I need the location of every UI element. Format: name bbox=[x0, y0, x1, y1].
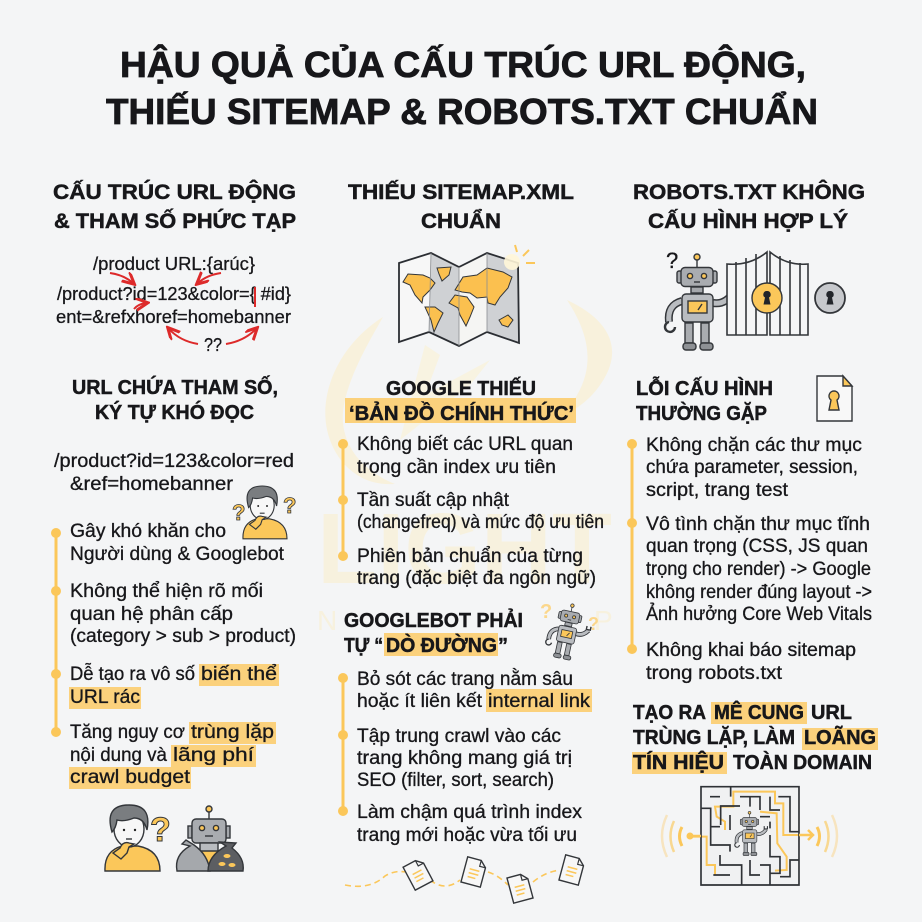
bullet list: trọng cần index ưu tiên bbox=[357, 456, 556, 478]
heading: dynamic URL: CẤU TRÚC URL ĐỘNG bbox=[53, 179, 296, 204]
icon: robot at locked gate bbox=[665, 248, 845, 350]
bullet list: hoặc ít liên kết bbox=[357, 690, 483, 712]
heading: Google lacks official map: GOOGLE THIẾU bbox=[386, 377, 536, 400]
bullet list: (category > sub > product) bbox=[70, 625, 296, 647]
watermark logo: N bbox=[317, 605, 337, 636]
bullet list: trọng cho render) -> Google bbox=[646, 558, 871, 580]
bullet list: Không chặn các thư mục bbox=[646, 434, 862, 456]
heading: URL with parameters: KÝ TỰ KHÓ ĐỌC bbox=[95, 400, 254, 424]
icon: folded world map bbox=[399, 245, 535, 346]
bullet list: Không khai báo sitemap bbox=[646, 639, 856, 661]
watermark logo bbox=[317, 300, 613, 636]
icon: lost robot: ? bbox=[540, 601, 552, 623]
bullet list bbox=[646, 434, 872, 684]
icon: locked file bbox=[817, 376, 852, 421]
heading: Googlebot finds its way: DÒ ĐƯỜNG bbox=[386, 633, 497, 657]
URL example: /product?id=123&color=red bbox=[54, 450, 294, 472]
heading: dynamic URL bbox=[53, 179, 296, 233]
heading: missing sitemap: THIẾU SITEMAP.XML bbox=[348, 179, 574, 204]
bullet timeline bbox=[51, 528, 61, 737]
bullet list bbox=[357, 667, 592, 846]
icon: robot in maze bbox=[662, 787, 837, 885]
heading: Googlebot finds its way: ” bbox=[498, 634, 508, 657]
title bbox=[106, 43, 818, 132]
heading: URL maze conclusion: LOÃNG bbox=[804, 726, 876, 749]
icon: robot at locked gate: ? bbox=[666, 248, 678, 273]
bullet list: URL rác bbox=[70, 686, 140, 708]
bullet list: chứa parameter, session, bbox=[646, 456, 858, 478]
URL illustration with red arrows: ?? bbox=[204, 334, 222, 355]
bullet timeline bbox=[338, 439, 348, 561]
bullet list: không render đúng layout -> bbox=[646, 581, 872, 603]
heading: common config errors bbox=[636, 376, 773, 425]
icon: thinking person: ? bbox=[150, 811, 171, 849]
bullet list: Vô tình chặn thư mục tĩnh bbox=[646, 513, 870, 535]
bullet list: (changefreq) và mức độ ưu tiên bbox=[357, 511, 604, 533]
heading: dynamic URL: & THAM SỐ PHỨC TẠP bbox=[54, 207, 296, 233]
icon: scattered pages on dashed path bbox=[345, 855, 585, 903]
watermark logo: LIGHT bbox=[317, 493, 612, 605]
heading: Googlebot finds its way: TỰ “ bbox=[344, 634, 383, 657]
URL illustration with red arrows: /product URL:{arúc} bbox=[93, 253, 255, 274]
URL illustration with red arrows: ent=&refxhoref=homebanner bbox=[56, 306, 291, 327]
heading: common config errors: LỖI CẤU HÌNH bbox=[636, 376, 773, 400]
watermark logo: P bbox=[594, 605, 613, 636]
bullet list: quan hệ phân cấp bbox=[70, 603, 233, 625]
bullet list: Tần suất cập nhật bbox=[357, 489, 510, 511]
icon: lost robot bbox=[540, 600, 599, 663]
bullet list: internal link bbox=[488, 690, 590, 712]
bullet timeline bbox=[627, 439, 637, 654]
icon: thinking person bbox=[105, 805, 171, 871]
heading: robots.txt bbox=[633, 179, 865, 233]
heading: Googlebot finds its way bbox=[344, 609, 523, 657]
heading: URL maze conclusion: TRÙNG LẶP, LÀM bbox=[633, 725, 795, 749]
bullet list: trùng lặp bbox=[191, 721, 274, 743]
bullet timeline bbox=[338, 673, 348, 816]
bullet list: Phiên bản chuẩn của từng bbox=[357, 545, 583, 567]
heading: URL with parameters: URL CHỨA THAM SỐ, bbox=[72, 375, 278, 399]
panel: dynamic URL structure bbox=[51, 179, 296, 871]
panel: robots.txt bbox=[627, 179, 878, 885]
heading: robots.txt: CẤU HÌNH HỢP LÝ bbox=[648, 208, 848, 233]
bullet list: lãng phí bbox=[173, 744, 255, 766]
bullet list: Làm chậm quá trình index bbox=[357, 801, 582, 823]
bullet list: Không thể hiện rõ mối bbox=[70, 580, 263, 602]
bullet list: Tập trung crawl vào các bbox=[357, 725, 561, 747]
bullet list: Tăng nguy cơ bbox=[70, 721, 185, 743]
bullet list bbox=[69, 520, 296, 789]
heading: URL maze conclusion: TOÀN DOMAIN bbox=[733, 751, 872, 774]
heading: robots.txt: ROBOTS.TXT KHÔNG bbox=[633, 179, 865, 204]
bullet list: Dễ tạo ra vô số bbox=[70, 662, 195, 685]
icon: robot with garbage bags bbox=[177, 806, 243, 871]
bullet list bbox=[357, 433, 604, 589]
heading: Google lacks official map: ‘BẢN ĐỒ CHÍNH THỨC’ bbox=[349, 401, 574, 425]
bullet list: Ảnh hưởng Core Web Vitals bbox=[646, 602, 872, 625]
title: HẬU QUẢ CỦA CẤU TRÚC URL ĐỘNG, bbox=[120, 43, 806, 85]
heading: URL maze conclusion: MÊ CUNG bbox=[714, 700, 804, 724]
bullet list: biến thể bbox=[201, 663, 277, 685]
title: THIẾU SITEMAP & ROBOTS.TXT CHUẨN bbox=[106, 90, 818, 132]
URL illustration with red arrows bbox=[56, 253, 291, 355]
icon: confused person small: ? bbox=[283, 493, 296, 518]
heading: URL with parameters bbox=[72, 375, 278, 424]
bullet list: crawl budget bbox=[70, 766, 191, 788]
panel: missing sitemap bbox=[338, 179, 604, 903]
bullet list: trang mới hoặc vừa tối ưu bbox=[357, 824, 577, 846]
heading: common config errors: THƯỜNG GẶP bbox=[636, 401, 767, 425]
heading: URL maze conclusion: TÍN HIỆU bbox=[633, 750, 724, 774]
heading: URL maze conclusion: URL bbox=[811, 701, 852, 724]
bullet list: SEO (filter, sort, search) bbox=[357, 769, 554, 791]
bullet list: Không biết các URL quan bbox=[357, 433, 573, 455]
URL example: &ref=homebanner bbox=[70, 473, 234, 495]
bullet list: trang không mang giá trị bbox=[357, 747, 572, 769]
icon: confused person small bbox=[232, 486, 296, 539]
URL illustration with red arrows: /product?id=123&color={ #id} bbox=[57, 283, 291, 304]
heading: URL maze conclusion bbox=[632, 700, 878, 774]
icon: confused person small: ? bbox=[232, 500, 245, 525]
bullet list: trong robots.txt bbox=[646, 662, 783, 684]
heading: missing sitemap: CHUẨN bbox=[421, 208, 501, 233]
bullet list: trang (đặc biệt đa ngôn ngữ) bbox=[357, 567, 596, 589]
heading: URL maze conclusion: TẠO RA bbox=[633, 701, 706, 724]
bullet list: nội dung và bbox=[70, 744, 167, 766]
bullet list: quan trọng (CSS, JS quan bbox=[646, 535, 868, 557]
bullet list: Bỏ sót các trang nằm sâu bbox=[357, 667, 573, 690]
bullet list: Gây khó khăn cho bbox=[70, 520, 226, 542]
heading: Google lacks official map bbox=[345, 377, 576, 425]
bullet list: script, trang test bbox=[646, 479, 789, 501]
heading: missing sitemap bbox=[348, 179, 574, 233]
URL example bbox=[54, 450, 294, 495]
heading: Googlebot finds its way: GOOGLEBOT PHẢI bbox=[344, 609, 523, 632]
icon: lost robot: ? bbox=[588, 614, 599, 634]
bullet list: Người dùng & Googlebot bbox=[70, 543, 285, 565]
